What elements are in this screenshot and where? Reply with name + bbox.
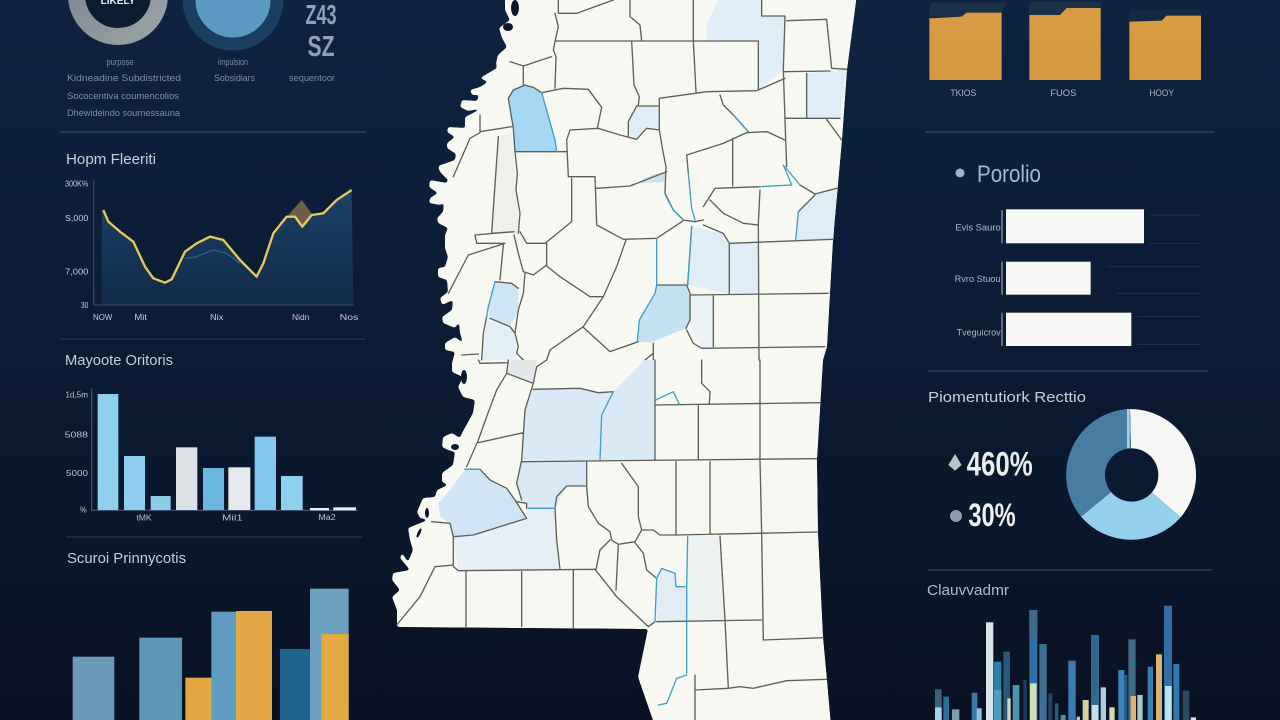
state silhouette: [392, 0, 857, 720]
county boundaries north: [448, 0, 847, 360]
donut chart: [1066, 409, 1196, 540]
stat numbers: SZ: [308, 31, 334, 63]
heading: horizontal bars: Porolio: [977, 161, 1041, 188]
heading: bar chart: Mayoote Oritoris: [65, 352, 173, 369]
axis labels: Nix: [210, 313, 223, 322]
gauge captions: Sococentiva coumencolios: [67, 91, 180, 101]
bar labels: Evis Sauro: [955, 222, 1001, 232]
bar chart: [65, 388, 358, 523]
strong blue counties: [508, 85, 557, 152]
bar labels: [955, 222, 1001, 337]
grid lines: [1107, 215, 1200, 344]
gauge captions: [67, 57, 335, 118]
axis labels: 5000: [66, 469, 89, 478]
folder labels: [950, 88, 1174, 98]
shaded counties south: [438, 360, 725, 622]
dense bar chart: [935, 606, 1196, 720]
axis labels: 5088: [65, 431, 89, 440]
stat 30 percent: 30%: [968, 497, 1016, 533]
brown peak: [288, 200, 312, 227]
stat numbers: [306, 0, 336, 63]
axis labels: 300K%: [65, 180, 88, 189]
heading: grouped bars: Scuroi Prinnycotis: [67, 550, 186, 567]
axis labels: 7,000: [65, 268, 89, 277]
bar labels: Rvro Stuou: [955, 274, 1001, 284]
axes: [94, 180, 353, 305]
axis ticks: [1000, 210, 1004, 346]
yellow trend line: [103, 190, 352, 283]
gauge captions: Kidneadine Subdistricted: [67, 73, 181, 83]
panel: top left gauges: [67, 0, 336, 118]
axis labels: [65, 390, 336, 523]
gauge captions: purpose: [106, 57, 134, 67]
heading: horizontal bars: [956, 161, 1041, 188]
axis labels: 1d,5m: [65, 390, 88, 399]
heading: donut: Piomentutiork Recttio: [928, 390, 1086, 406]
axes: [92, 388, 358, 510]
axis labels: Nos: [340, 313, 358, 322]
axis labels: tMK: [136, 514, 152, 523]
shaded counties north: [482, 0, 847, 360]
folder labels: HOOY: [1149, 88, 1174, 98]
axis labels: [65, 180, 358, 322]
stat 30 percent: [950, 497, 1016, 533]
river highlights north: [487, 93, 800, 342]
stat 460 percent: [948, 445, 1033, 483]
line chart: [65, 180, 358, 322]
axis labels: Nidn: [292, 313, 309, 322]
donut gauge blue: [189, 0, 277, 44]
axis labels: Mil1: [222, 514, 243, 523]
horizontal bar chart: [955, 209, 1200, 346]
folder labels: TKIOS: [950, 88, 976, 98]
bars: [98, 394, 356, 510]
river highlights south: [465, 392, 688, 705]
axis labels: Mit: [134, 313, 148, 322]
folder tabs: [929, 2, 1201, 21]
axis labels: 30: [81, 301, 89, 310]
area series: [102, 190, 353, 305]
southern counties: [397, 360, 827, 720]
coastline notches: [416, 0, 519, 538]
folder two: [1029, 8, 1101, 80]
gauge captions: impulsion: [218, 57, 248, 67]
stat 460 percent: 460%: [967, 445, 1033, 483]
gauge captions: Dhewideindo sournessauna: [67, 108, 180, 118]
axis labels: NOW: [93, 313, 113, 322]
bar labels: Tveguicrov: [957, 327, 1001, 337]
panel: folders: [929, 2, 1201, 98]
folder three: [1129, 16, 1201, 80]
map of counties: [392, 0, 857, 720]
donut gauge grey: [76, 0, 160, 36]
heading: line chart: Hopm Fleeriti: [66, 152, 156, 168]
folder labels: FUOS: [1050, 88, 1076, 98]
grouped bar chart: [73, 589, 349, 720]
axis labels: %: [80, 505, 87, 514]
donut chart and stats: [948, 409, 1196, 540]
heading: spectrum bars: Clauvvadmr: [927, 583, 1009, 599]
folder one: [929, 13, 1002, 80]
gauge captions: Sobsidiars: [214, 73, 255, 83]
gauge captions: sequentoor: [289, 73, 335, 83]
axis labels: Ma2: [318, 513, 336, 522]
northern counties: [448, 0, 847, 360]
axis labels: S,000: [65, 214, 89, 223]
county boundaries south: [397, 360, 827, 720]
white bars: [1006, 209, 1144, 346]
